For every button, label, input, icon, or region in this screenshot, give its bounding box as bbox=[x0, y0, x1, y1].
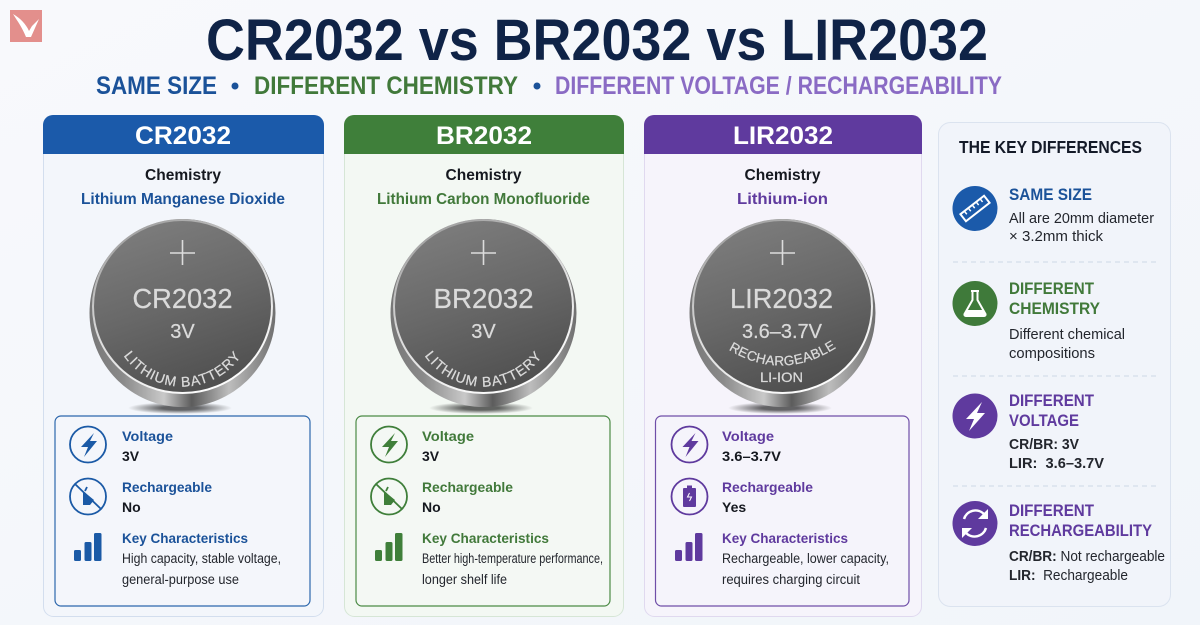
panel header: CR2032 bbox=[43, 115, 324, 154]
icon: not rechargeable bbox=[70, 478, 106, 514]
stats box: CR2032 bbox=[55, 416, 310, 606]
battery: LIR2032: 3.6–3.7V bbox=[742, 321, 823, 343]
text: different rechargeability: CR/BR: Not rechargeable bbox=[1009, 549, 1165, 565]
panel: CR2032 bbox=[43, 115, 324, 617]
key characteristics text: general-purpose use bbox=[122, 572, 239, 587]
icon: logo bbox=[10, 10, 42, 42]
text: different rechargeability: DIFFERENT bbox=[1009, 502, 1094, 520]
rechargeable text bbox=[122, 479, 212, 515]
text: same size: All are 20mm diameter bbox=[1009, 211, 1154, 227]
sidebar heading: THE KEY DIFFERENCES bbox=[959, 137, 1142, 157]
item: different chemistry bbox=[952, 280, 1125, 362]
key characteristics text: Key Characteristics bbox=[422, 530, 549, 546]
panel header: CR2032: CR2032 bbox=[135, 122, 231, 150]
text: different chemistry: CHEMISTRY bbox=[1009, 300, 1100, 318]
text: different rechargeability: LIR: Rechargeable bbox=[1009, 568, 1128, 584]
text: different voltage: VOLTAGE bbox=[1009, 412, 1079, 430]
icon: bars bbox=[74, 533, 102, 561]
icon: voltage bbox=[672, 426, 708, 462]
key characteristics text: requires charging circuit bbox=[722, 572, 860, 587]
chemistry text: Chemistry bbox=[145, 167, 221, 184]
text: different chemistry: compositions bbox=[1009, 346, 1095, 362]
text: different chemistry: DIFFERENT bbox=[1009, 280, 1094, 298]
voltage text bbox=[722, 428, 782, 464]
chemistry text: Chemistry bbox=[446, 167, 522, 184]
icon: rechargeable battery bbox=[672, 478, 708, 514]
voltage text bbox=[422, 428, 474, 464]
icon: voltage bbox=[371, 426, 407, 462]
key characteristics text: Key Characteristics bbox=[122, 530, 248, 546]
voltage text bbox=[122, 428, 173, 464]
chemistry text bbox=[737, 167, 828, 208]
stats box: LIR2032 bbox=[656, 416, 909, 606]
chemistry text bbox=[81, 167, 285, 208]
text: same size: SAME SIZE bbox=[1009, 186, 1092, 204]
icon: not rechargeable bbox=[371, 478, 407, 514]
battery: BR2032: BR2032 bbox=[434, 283, 534, 314]
chemistry text bbox=[377, 167, 590, 208]
panel header: LIR2032 bbox=[644, 115, 922, 154]
chemistry text: Lithium Manganese Dioxide bbox=[81, 191, 285, 208]
battery: LIR2032 bbox=[690, 219, 876, 414]
voltage text: 3.6–3.7V bbox=[722, 448, 782, 464]
battery: BR2032 bbox=[390, 219, 576, 414]
voltage text: 3V bbox=[422, 448, 440, 464]
panel header: BR2032 bbox=[344, 115, 624, 154]
battery: CR2032 bbox=[90, 219, 276, 414]
text: different voltage bbox=[1009, 392, 1104, 472]
chemistry text: Chemistry bbox=[744, 167, 821, 184]
chemistry text: Lithium Carbon Monofluoride bbox=[377, 191, 590, 208]
subtitle: SAME SIZE bbox=[96, 72, 217, 100]
battery: LIR2032: RECHARGEABLE bbox=[729, 340, 836, 366]
subtitle: DIFFERENT CHEMISTRY bbox=[254, 72, 518, 100]
key characteristics text bbox=[122, 530, 281, 587]
battery: BR2032: LITHIUM BATTERY bbox=[425, 350, 540, 387]
rechargeable text: Rechargeable bbox=[122, 479, 212, 495]
chemistry text: Lithium-ion bbox=[737, 191, 828, 208]
stats box: BR2032 bbox=[356, 416, 610, 606]
item: different voltage bbox=[952, 392, 1104, 472]
panel header: LIR2032: LIR2032 bbox=[733, 122, 833, 150]
text: different chemistry: Different chemical bbox=[1009, 327, 1125, 343]
key characteristics text: Better high-temperature performance, bbox=[422, 551, 603, 566]
title: CR2032 vs BR2032 vs LIR2032 bbox=[206, 8, 988, 73]
subtitle bbox=[96, 72, 1002, 100]
text: different chemistry bbox=[1009, 280, 1125, 362]
text: different voltage: DIFFERENT bbox=[1009, 392, 1094, 410]
text: different voltage: LIR: 3.6–3.7V bbox=[1009, 456, 1104, 472]
rechargeable text: No bbox=[122, 499, 141, 515]
rechargeable text: No bbox=[422, 499, 441, 515]
panel: the key differences bbox=[938, 122, 1170, 606]
subtitle: DIFFERENT VOLTAGE / RECHARGEABILITY bbox=[555, 72, 1002, 100]
icon: bars bbox=[675, 533, 702, 561]
battery: CR2032: 3V bbox=[170, 321, 195, 343]
text: different rechargeability: RECHARGEABILITY bbox=[1009, 522, 1152, 540]
voltage text: Voltage bbox=[422, 428, 474, 444]
panel: BR2032 bbox=[344, 115, 624, 617]
icon: flask bbox=[952, 281, 998, 326]
battery: CR2032: CR2032 bbox=[132, 283, 232, 314]
key characteristics text: Key Characteristics bbox=[722, 530, 848, 546]
battery: CR2032: LITHIUM BATTERY bbox=[124, 350, 239, 387]
voltage text: 3V bbox=[122, 448, 140, 464]
key characteristics text bbox=[422, 530, 603, 587]
icon: bolt bbox=[952, 394, 998, 438]
key characteristics text: longer shelf life bbox=[422, 572, 507, 587]
item: same size bbox=[952, 186, 1154, 245]
key characteristics text: High capacity, stable voltage, bbox=[122, 551, 281, 566]
panel: LIR2032 bbox=[644, 115, 922, 617]
icon: voltage bbox=[70, 426, 106, 462]
rechargeable text: Yes bbox=[722, 499, 746, 515]
panel header: BR2032: BR2032 bbox=[436, 122, 532, 150]
icon: ruler bbox=[952, 186, 998, 231]
key characteristics text bbox=[722, 530, 889, 587]
rechargeable text: Rechargeable bbox=[422, 479, 513, 495]
text: different rechargeability bbox=[1009, 502, 1165, 584]
text: same size: × 3.2mm thick bbox=[1009, 229, 1104, 245]
voltage text: Voltage bbox=[122, 428, 173, 444]
text: different voltage: CR/BR: 3V bbox=[1009, 437, 1079, 453]
icon: cycle arrows bbox=[952, 501, 998, 546]
voltage text: Voltage bbox=[722, 428, 774, 444]
battery: LIR2032: LIR2032 bbox=[730, 283, 833, 314]
rechargeable text bbox=[422, 479, 513, 515]
icon: bars bbox=[375, 533, 402, 561]
rechargeable text bbox=[722, 479, 813, 515]
rechargeable text: Rechargeable bbox=[722, 479, 813, 495]
text: same size bbox=[1009, 186, 1154, 245]
battery: LIR2032: LI-ION bbox=[760, 369, 803, 385]
item: different rechargeability bbox=[952, 501, 1165, 584]
battery: BR2032: 3V bbox=[471, 321, 496, 343]
key characteristics text: Rechargeable, lower capacity, bbox=[722, 551, 889, 566]
